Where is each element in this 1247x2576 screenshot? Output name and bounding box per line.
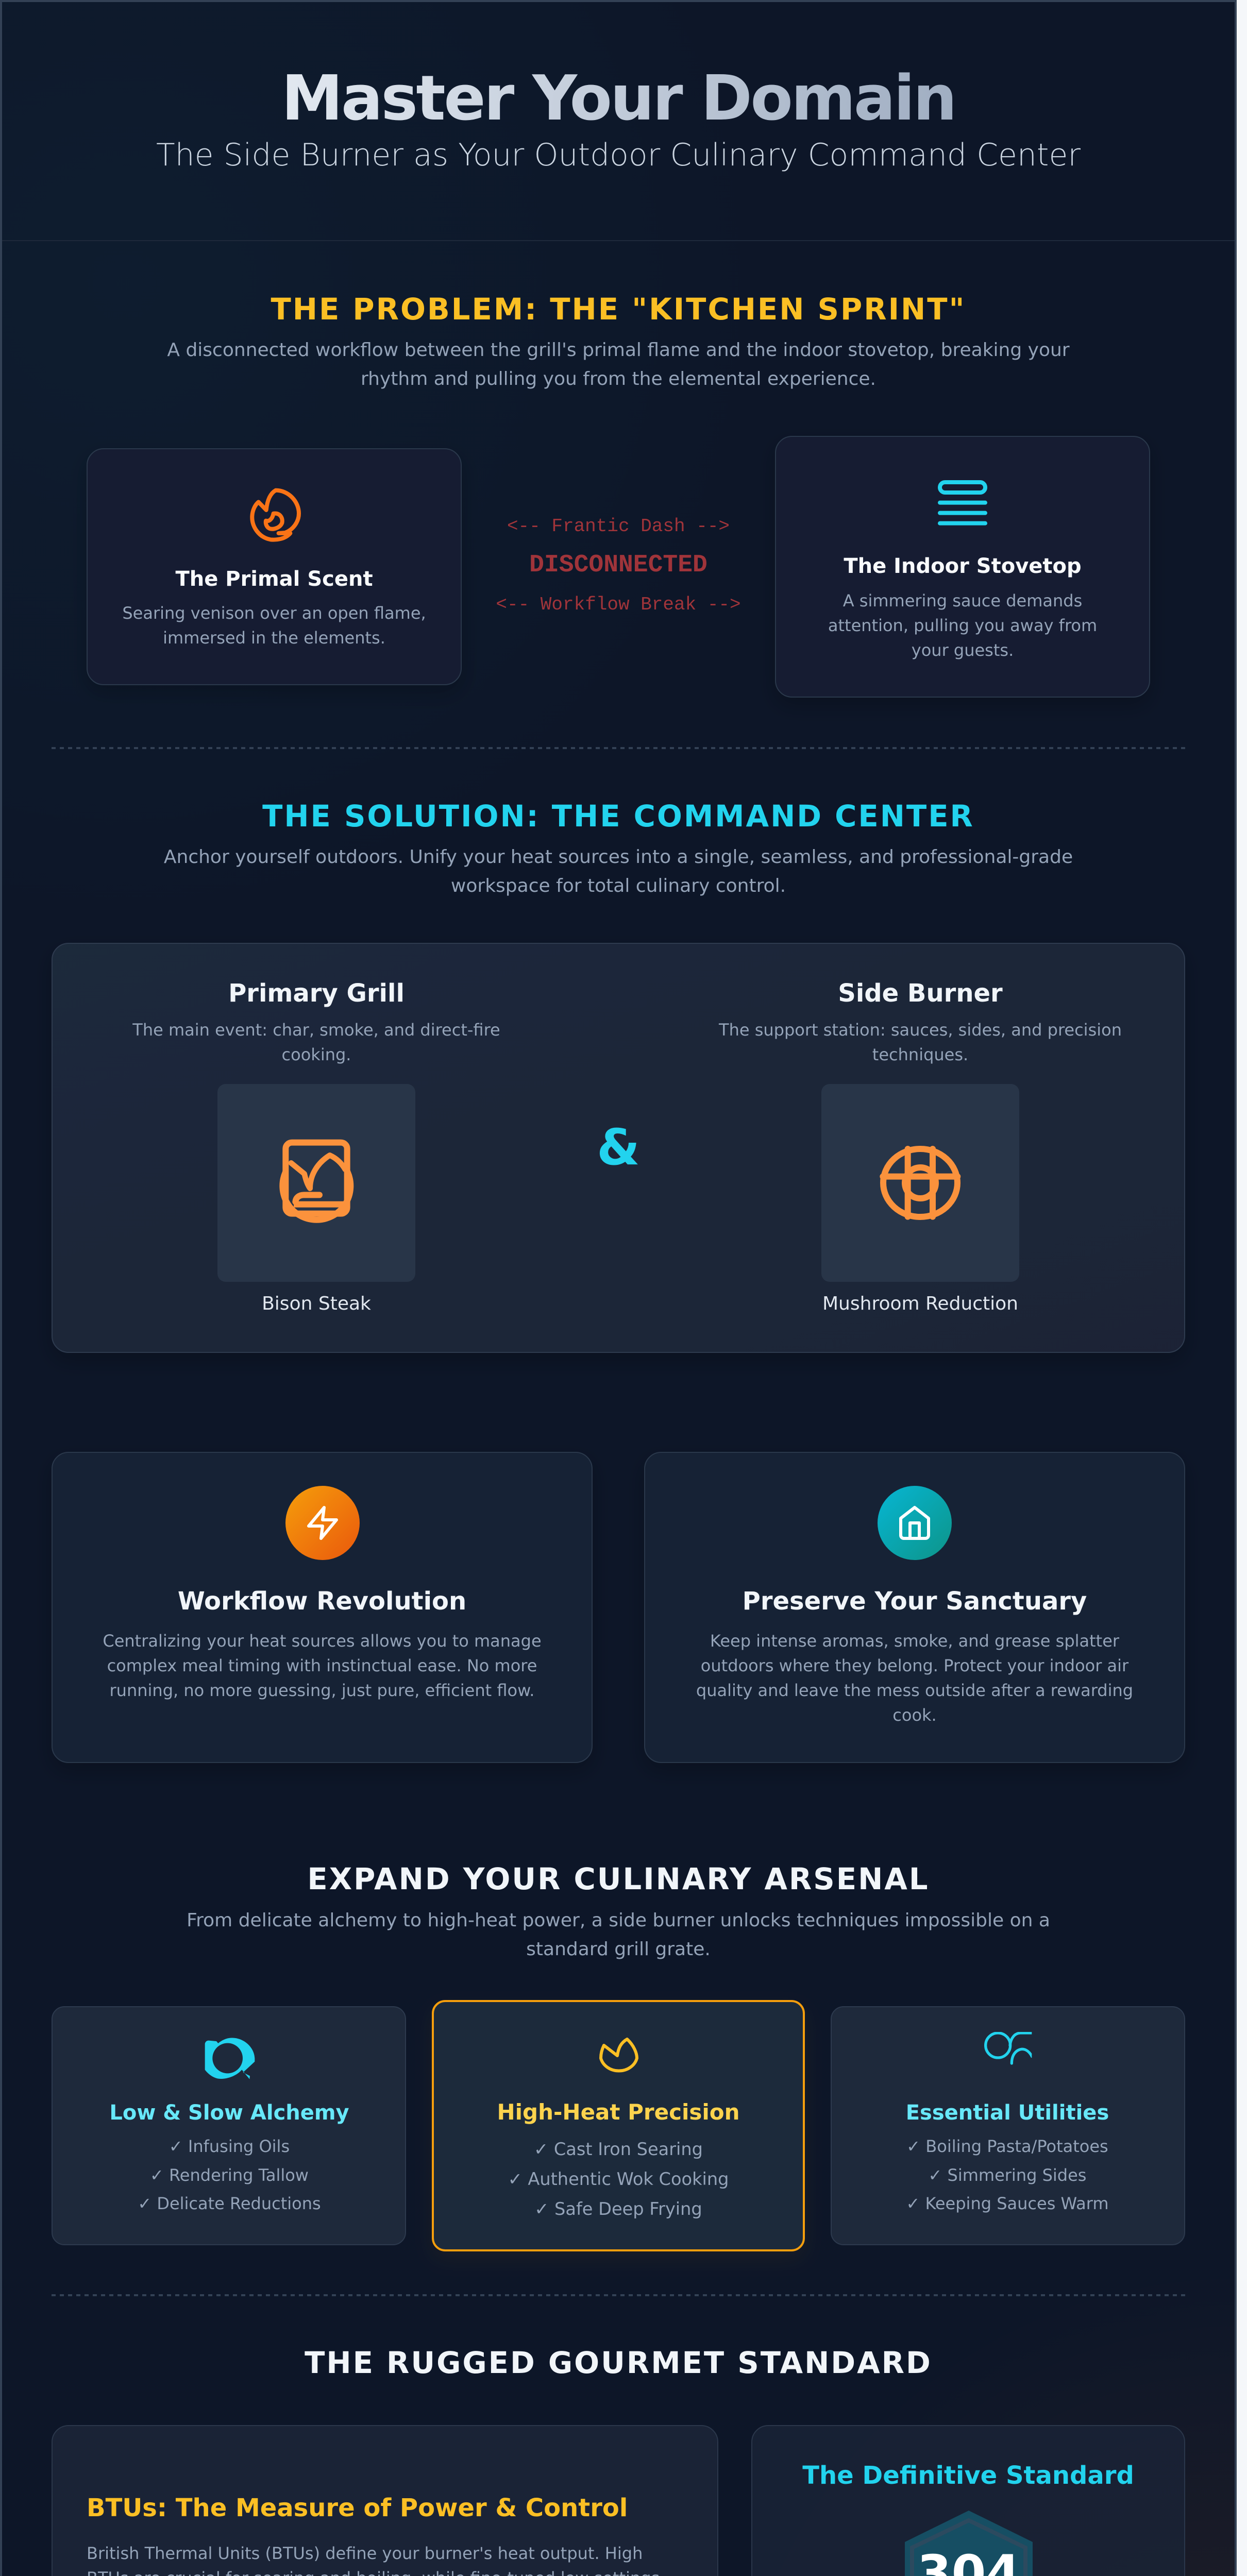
column: side burner: The support station: sauces, sides, and precision	[718, 1020, 1122, 1040]
panel: high-heat precision	[433, 2001, 804, 2250]
card text: Centralizing your heat sources allows you to manage	[103, 1631, 542, 1651]
icon: house	[878, 1486, 952, 1560]
icon: stovetop	[940, 482, 985, 523]
technique list: ✓ Cast Iron Searing	[534, 2139, 703, 2159]
column: side burner: techniques.	[872, 1045, 968, 1064]
icon: bison steak	[282, 1143, 350, 1220]
technique list: ✓ Keeping Sauces Warm	[906, 2194, 1109, 2213]
panel: workflow revolution	[52, 1452, 592, 1762]
panel: low and slow alchemy	[52, 2007, 406, 2245]
card title: The Indoor Stovetop	[844, 554, 1082, 578]
panel: the indoor stovetop	[776, 436, 1150, 697]
card text: Searing venison over an open flame,	[122, 603, 426, 623]
column: side burner: Side Burner	[838, 979, 1003, 1008]
panel: command center	[52, 943, 1185, 1352]
arsenal description: standard grill grate.	[526, 1939, 711, 1960]
card text: Keep intense aromas, smoke, and grease splatter	[710, 1631, 1120, 1651]
icon: swirl	[205, 2038, 255, 2079]
section: culinary arsenal	[52, 1862, 1185, 2250]
section: the solution	[52, 799, 1185, 1352]
panel: essential utilities	[831, 2007, 1185, 2245]
card text: outdoors where they belong. Protect your indoor air	[701, 1656, 1129, 1675]
card text: immersed in the elements.	[163, 628, 385, 648]
panel: definitive standard	[752, 2426, 1185, 2576]
section: benefits	[52, 1452, 1185, 1762]
card text: cook.	[892, 1705, 937, 1725]
header	[156, 63, 1081, 173]
column: primary grill: cooking.	[282, 1045, 351, 1064]
panel: the primal scent	[87, 449, 461, 685]
card text: attention, pulling you away from	[828, 616, 1097, 635]
icon: flame	[601, 2039, 637, 2071]
card title: Essential Utilities	[906, 2101, 1109, 2125]
badge: 304 hexagon	[905, 2511, 1033, 2576]
card text: quality and leave the mess outside after a rewarding	[696, 1681, 1133, 1700]
title: Master Your Domain	[281, 63, 955, 134]
solution description: workspace for total culinary control.	[451, 875, 786, 896]
standard heading: THE RUGGED GOURMET STANDARD	[305, 2346, 932, 2380]
technique list: ✓ Safe Deep Frying	[534, 2199, 702, 2219]
icon: flame	[252, 490, 299, 540]
icon: burner	[883, 1149, 957, 1217]
card title: High-Heat Precision	[497, 2099, 740, 2125]
btu text: British Thermal Units (BTUs) define your burner's heat output. High	[87, 2544, 643, 2563]
column: primary grill	[132, 979, 500, 1314]
subtitle: The Side Burner as Your Outdoor Culinary Command Center	[156, 137, 1081, 173]
column: primary grill: Primary Grill	[228, 979, 405, 1008]
disconnect callout: <-- Frantic Dash -->	[507, 516, 730, 537]
technique list: ✓ Boiling Pasta/Potatoes	[906, 2137, 1108, 2156]
btu heading: BTUs: The Measure of Power & Control	[87, 2494, 628, 2522]
card title: Low & Slow Alchemy	[109, 2101, 349, 2125]
technique list: ✓ Rendering Tallow	[150, 2165, 309, 2185]
solution description: Anchor yourself outdoors. Unify your heat sources into a single, seamless, and professional-grade	[164, 846, 1073, 868]
icon: utilities	[986, 2033, 1032, 2063]
card text: your guests.	[912, 640, 1014, 660]
icon: lightning bolt	[285, 1486, 360, 1560]
solution heading: THE SOLUTION: THE COMMAND CENTER	[262, 799, 974, 834]
technique list: ✓ Delicate Reductions	[138, 2194, 321, 2213]
card title: Preserve Your Sanctuary	[743, 1587, 1087, 1616]
card title: Workflow Revolution	[178, 1587, 466, 1616]
column: side burner: Mushroom Reduction	[822, 1293, 1018, 1314]
column: side burner	[718, 979, 1122, 1314]
disconnect callout: <-- Workflow Break -->	[496, 594, 741, 615]
technique list: ✓ Simmering Sides	[929, 2165, 1086, 2185]
section: the problem	[87, 292, 1150, 697]
card text: complex meal timing with instinctual ease. No more	[107, 1656, 537, 1675]
disconnect callout: DISCONNECTED	[529, 551, 707, 579]
arsenal description: From delicate alchemy to high-heat power, a side burner unlocks techniques impossible on a	[187, 1910, 1050, 1931]
panel: preserve your sanctuary	[645, 1452, 1185, 1762]
column: primary grill: Bison Steak	[262, 1293, 371, 1314]
standard title: The Definitive Standard	[802, 2461, 1134, 2490]
arsenal heading: EXPAND YOUR CULINARY ARSENAL	[307, 1862, 930, 1896]
disconnect callout	[496, 516, 741, 615]
section: rugged gourmet standard	[52, 2346, 1185, 2576]
column: primary grill: The main event: char, smoke, and direct-fire	[132, 1020, 500, 1040]
panel: btu	[52, 2426, 718, 2576]
ampersand: &	[597, 1118, 640, 1176]
problem heading: THE PROBLEM: THE "KITCHEN SPRINT"	[271, 292, 966, 327]
problem description: rhythm and pulling you from the elemental experience.	[361, 368, 876, 389]
card title: The Primal Scent	[175, 567, 373, 591]
card text: A simmering sauce demands	[843, 591, 1082, 611]
problem description: A disconnected workflow between the grill's primal flame and the indoor stovetop, breaking your	[167, 340, 1070, 361]
technique list: ✓ Authentic Wok Cooking	[508, 2169, 729, 2189]
card text: running, no more guessing, just pure, efficient flow.	[110, 1681, 534, 1700]
technique list: ✓ Infusing Oils	[169, 2137, 290, 2156]
